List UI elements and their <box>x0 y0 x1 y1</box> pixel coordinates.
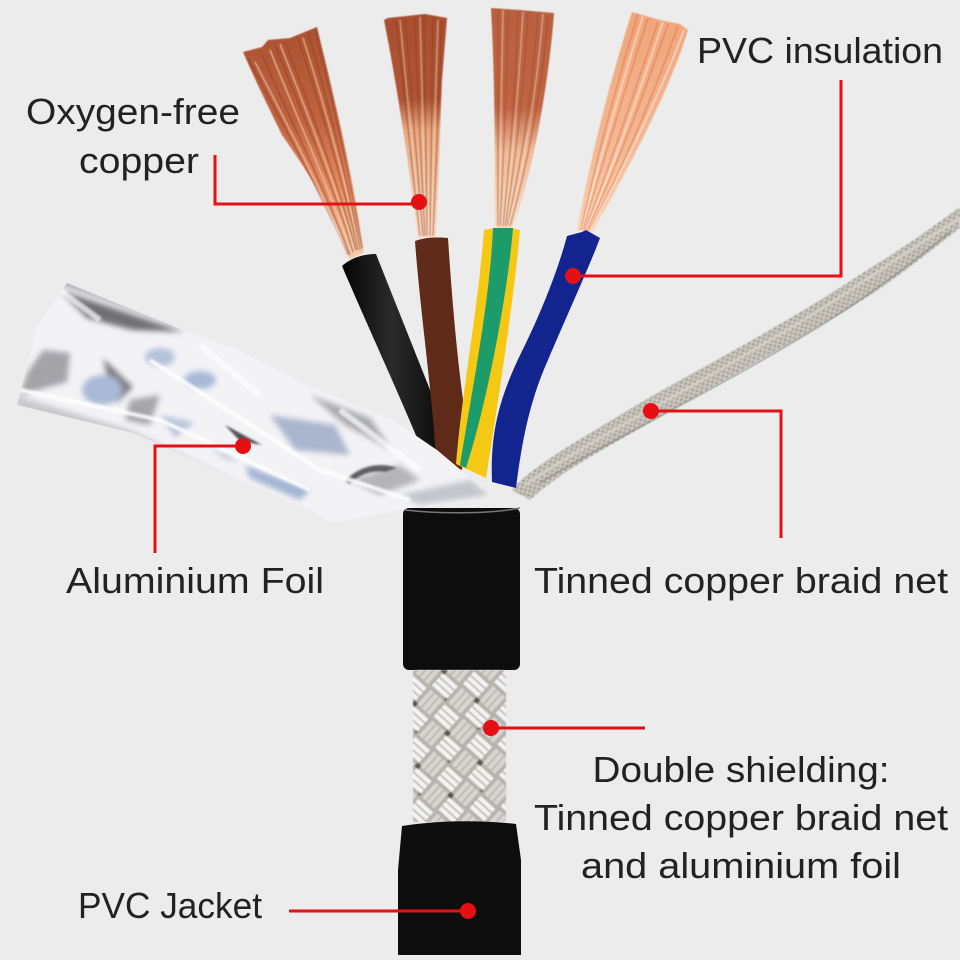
yellow-green insulated core <box>456 228 520 478</box>
upper PVC jacket <box>403 508 520 670</box>
copper strands: blue core <box>577 12 688 232</box>
callout: double shielding: Tinned copper braid net <box>534 797 948 838</box>
callout: double shielding: Double shielding: <box>592 749 890 790</box>
copper strands: black core <box>243 27 364 260</box>
callout: aluminium foil: Aluminium Foil <box>66 560 324 601</box>
shielding braid <box>413 670 506 822</box>
blue insulated core <box>492 230 600 488</box>
callout: oxygen-free copper: Oxygen-free <box>26 91 240 132</box>
copper strands: yellow-green core <box>491 8 554 228</box>
callout: PVC jacket: PVC Jacket <box>78 885 262 926</box>
lower PVC jacket <box>398 821 521 955</box>
callout: double shielding: and aluminium foil <box>581 845 901 886</box>
copper strands: brown core <box>384 14 447 238</box>
callout: PVC jacket <box>78 885 476 926</box>
tinned copper braid strand <box>512 207 960 500</box>
callout: PVC insulation: PVC insulation <box>697 30 943 71</box>
callout: aluminium foil <box>66 438 324 601</box>
callout: oxygen-free copper: copper <box>79 140 199 181</box>
callout: tinned copper braid net: Tinned copper braid net <box>534 560 948 601</box>
callout: oxygen-free copper <box>26 91 427 210</box>
aluminium foil <box>10 275 500 530</box>
black insulated core <box>342 254 452 470</box>
brown insulated core <box>415 237 466 470</box>
callout: tinned copper braid net <box>534 403 948 601</box>
callout: PVC insulation <box>565 30 943 284</box>
callout: double shielding <box>483 720 948 886</box>
